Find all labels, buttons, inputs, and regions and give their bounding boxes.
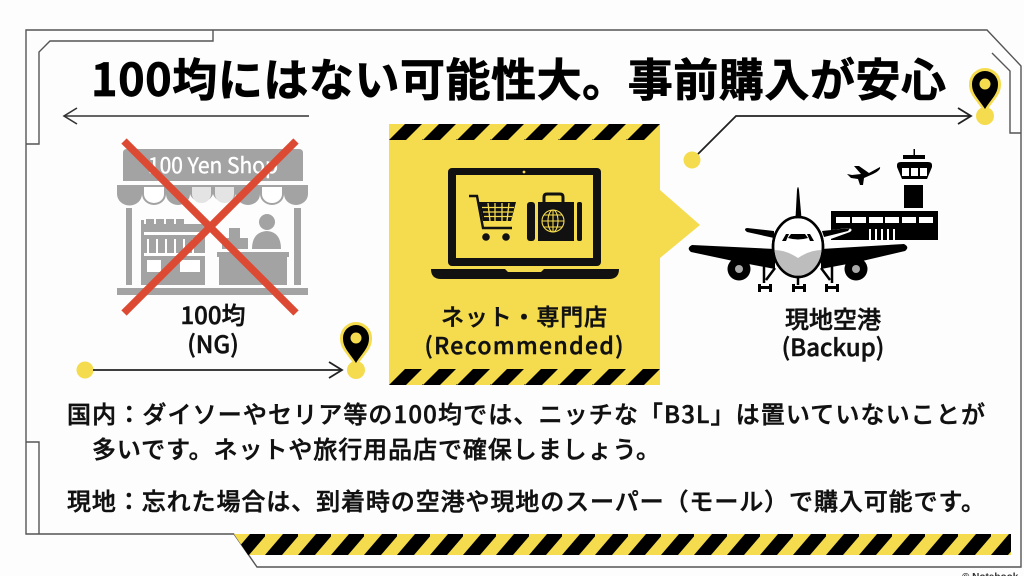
text: domestic line one: 国内：ダイソーやセリア等の100均では、ニッチな「B3L」は置いていないことが	[67, 395, 985, 430]
text block: details	[67, 395, 985, 517]
label: 100均 NG: 100均	[180, 296, 246, 331]
panel: recommended	[389, 124, 700, 385]
route: line to left pin	[76, 362, 342, 378]
icon: terminal	[822, 211, 938, 240]
label: local airport backup: 現地空港	[785, 300, 881, 335]
top hazard stripe	[389, 124, 660, 140]
label: local airport backup: (Backup)	[782, 328, 884, 363]
icon: laptop	[431, 168, 619, 279]
title: 100均にはない可能性大。事前購入が安心	[91, 44, 946, 109]
icon: red cross	[124, 141, 296, 313]
icon: airplane	[689, 187, 907, 292]
panel background with arrow	[389, 124, 700, 385]
icon: shop: 100 Yen Shop	[148, 150, 278, 180]
panel: airport	[689, 149, 938, 363]
route: line to right pin	[684, 108, 971, 168]
icon: right map pin	[969, 68, 1001, 125]
icon: shop	[117, 149, 308, 295]
icon: suitcase with globe	[527, 194, 582, 241]
icon: control tower	[897, 149, 932, 208]
label: local airport backup	[782, 300, 884, 363]
icon: left map pin	[340, 322, 372, 379]
hazard stripe: bottom	[234, 534, 1011, 555]
label: 100均 NG	[180, 296, 246, 360]
text: domestic line two: 多いです。ネットや旅行用品店で確保しましょう。	[92, 430, 660, 465]
panel: 100 yen shop	[117, 141, 308, 360]
label: net and specialty stores	[424, 298, 624, 361]
bottom hazard stripe	[389, 369, 660, 385]
icon: small plane	[847, 166, 880, 185]
arrow: left to shop	[64, 108, 309, 124]
text: local line: 現地：忘れた場合は、到着時の空港や現地のスーパー（モール）で購入可能です。	[67, 482, 985, 517]
icon: shopping cart	[469, 196, 516, 241]
label: net and specialty stores: ネット・専門店	[441, 298, 607, 332]
label: 100均 NG: (NG)	[187, 325, 239, 360]
label: net and specialty stores: (Recommended)	[424, 327, 624, 361]
